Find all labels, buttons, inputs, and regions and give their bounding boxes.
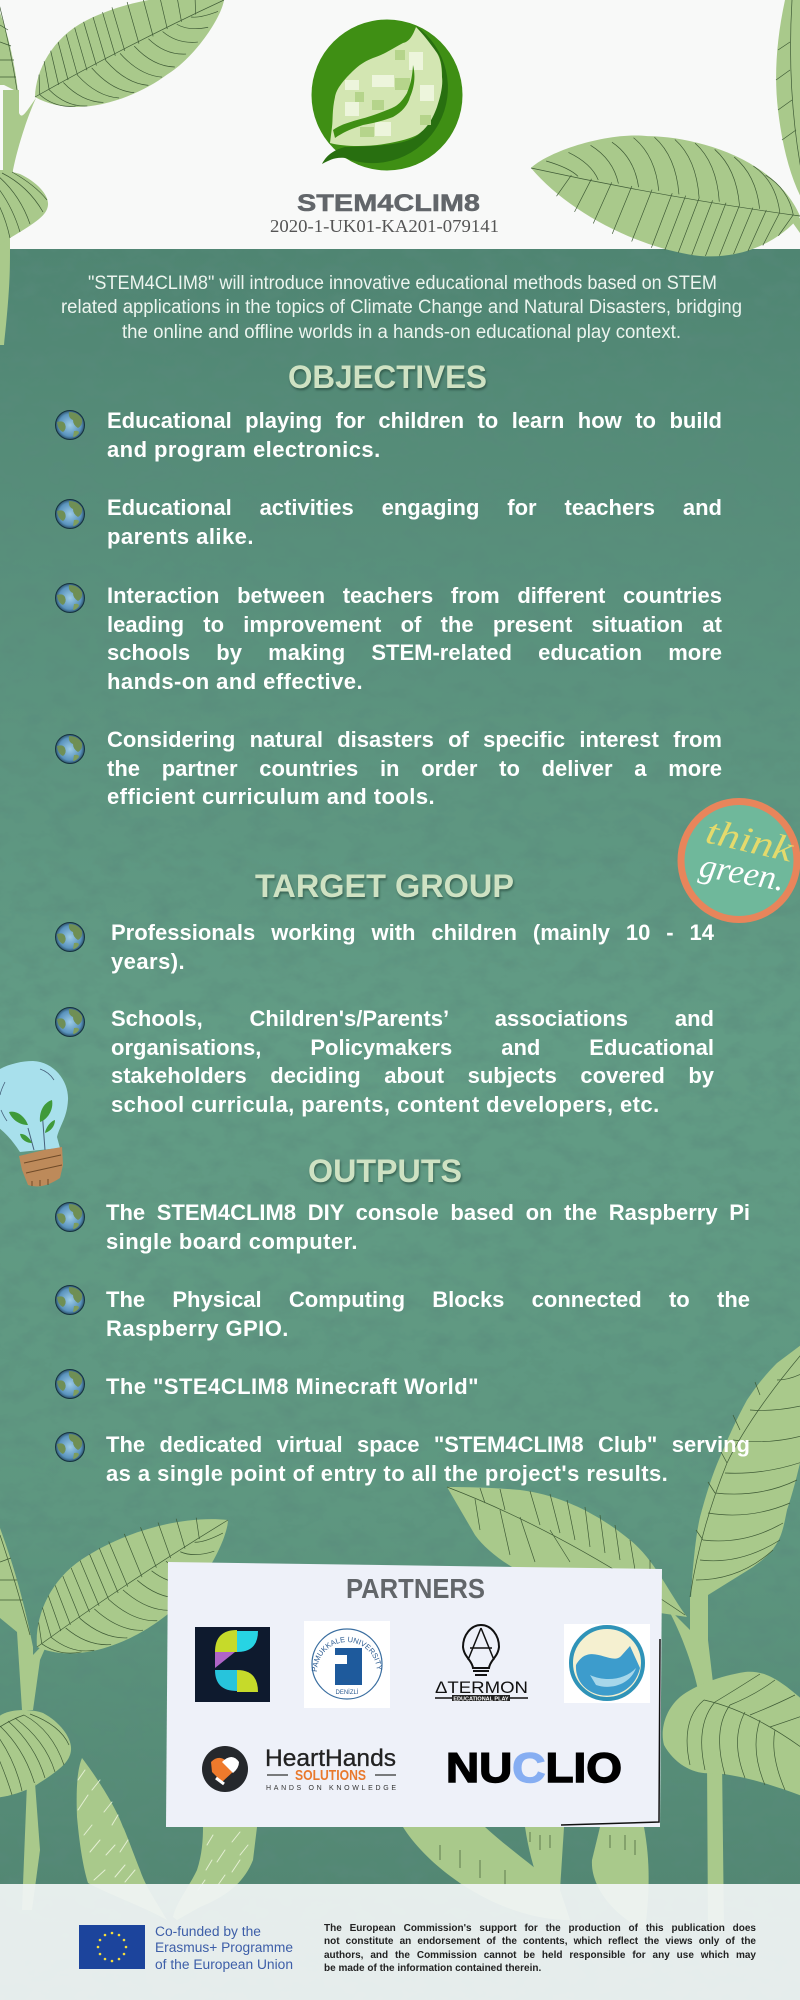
objective 3: Interaction between teachers from different countries [107,583,722,608]
output 1: single board computer. [106,1229,358,1254]
objective 3: schools by making STEM-related education more [107,640,722,665]
intro text: the online and offline worlds in a hands-on educational play context. [122,322,681,343]
output 1: The STEM4CLIM8 DIY console based on the Raspberry Pi [106,1200,750,1225]
disclaimer text: authors, and the Commission cannot be held responsible for any use which may [324,1950,756,1961]
output 3: The "STE4CLIM8 Minecraft World" [106,1374,479,1399]
output 2 [106,1287,750,1341]
objective 2: Educational activities engaging for teachers and [107,495,722,520]
project logo [312,20,462,170]
title: STEM4CLIM8 [297,190,480,217]
objective 3: leading to improvement of the present situation at [107,612,722,637]
logo: Pamukkale University: 1992 [343,1678,352,1683]
right round leaf [663,1672,800,1797]
icon: light bulb with plant [0,1061,68,1186]
badge: think green [681,802,798,920]
output 2: The Physical Computing Blocks connected to the [106,1287,750,1312]
logo: Pamukkale University [304,1621,390,1708]
target group 2: Schools, Children's/Parents’ associations and [111,1006,714,1031]
target group 1: years). [111,949,185,974]
target group 1: Professionals working with children (mainly 10 - 14 [111,920,714,945]
logo: Nuclio: NUCLIO [446,1744,622,1791]
output 4: The dedicated virtual space "STEM4CLIM8 Club" serving [106,1432,750,1457]
badge: think green: green. [697,847,788,899]
logo: E [195,1627,270,1702]
project code: 2020-1-UK01-KA201-079141 [270,216,499,236]
output 4 [106,1432,750,1486]
icon: globe bullets [56,410,84,1462]
Erasmus+ co-funded text: Erasmus+ Programme [155,1940,293,1955]
disclaimer text: be made of the information contained therein. [324,1963,541,1974]
top-left plant [0,0,243,345]
objective 4: the partner countries in order to deliver a more [107,756,722,781]
objective 2: parents alike. [107,524,254,549]
logo: Pamukkale University: PAMUKKALE UNIVERSITY [312,1636,382,1672]
output 2: Raspberry GPIO. [106,1316,289,1341]
disclaimer text: not constitute an endorsement of the contents, which reflect the views only of the [324,1936,756,1947]
logo: Atermon: ΔTERMON [435,1678,528,1697]
panel: partners [166,1562,662,1827]
objective 3 [107,583,722,694]
output 1 [106,1200,750,1254]
Erasmus+ co-funded text [155,1924,293,1972]
blade with dashes, left [77,1758,167,1920]
right stem [667,1595,724,1930]
intro text [61,273,742,343]
intro text: related applications in the topics of Climate Change and Natural Disasters, bridging [61,297,742,318]
logo: HeartHands Solutions [202,1745,396,1792]
objective 2 [107,495,722,549]
objective 4: Considering natural disasters of specific interest from [107,727,722,752]
disclaimer text [324,1923,756,1974]
partners heading: PARTNERS [346,1573,485,1604]
logo: HeartHands Solutions: HANDS ON KNOWLEDGE [266,1785,396,1792]
objective 4: efficient curriculum and tools. [107,784,435,809]
objective 3: hands-on and effective. [107,669,363,694]
logo: HeartHands Solutions: SOLUTIONS [295,1767,366,1784]
output 4: as a single point of entry to all the project's results. [106,1461,668,1486]
objective 4 [107,727,722,809]
tall right leaf [690,1342,800,1617]
target group 2: organisations, Policymakers and Educational [111,1035,714,1060]
top-right leaves [521,0,800,272]
objective 1 [107,408,722,462]
Erasmus+ co-funded text: of the European Union [155,1957,293,1972]
disclaimer text: The European Commission's support for the production of this publication does [324,1923,756,1934]
target group 2 [111,1006,714,1117]
target group 2: school curricula, parents, content developers, etc. [111,1092,660,1117]
footer band [0,1884,800,2000]
logo: Atermon [435,1625,528,1702]
badge: think green: think [702,811,798,870]
logo: Atermon: EDUCATIONAL PLAY [453,1696,509,1702]
objective 1: Educational playing for children to learn how to build [107,408,722,433]
heading: objectives: OBJECTIVES [288,359,487,395]
bottom plants [0,1342,800,1930]
intro text: "STEM4CLIM8" will introduce innovative educational methods based on STEM [88,273,717,294]
logo: water [564,1624,650,1703]
target group 2: stakeholders deciding about subjects covered by [111,1063,714,1088]
objective 1: and program electronics. [107,437,381,462]
heading: target group: TARGET GROUP [255,868,514,904]
target group 1 [111,920,714,974]
large central leaf [447,1487,687,1617]
logo: HeartHands Solutions: HeartHands [265,1745,396,1772]
heading: outputs: OUTPUTS [308,1153,462,1189]
EU flag [79,1925,145,1969]
Erasmus+ co-funded text: Co-funded by the [155,1924,261,1939]
logo: Pamukkale University: DENİZLİ [335,1689,359,1696]
